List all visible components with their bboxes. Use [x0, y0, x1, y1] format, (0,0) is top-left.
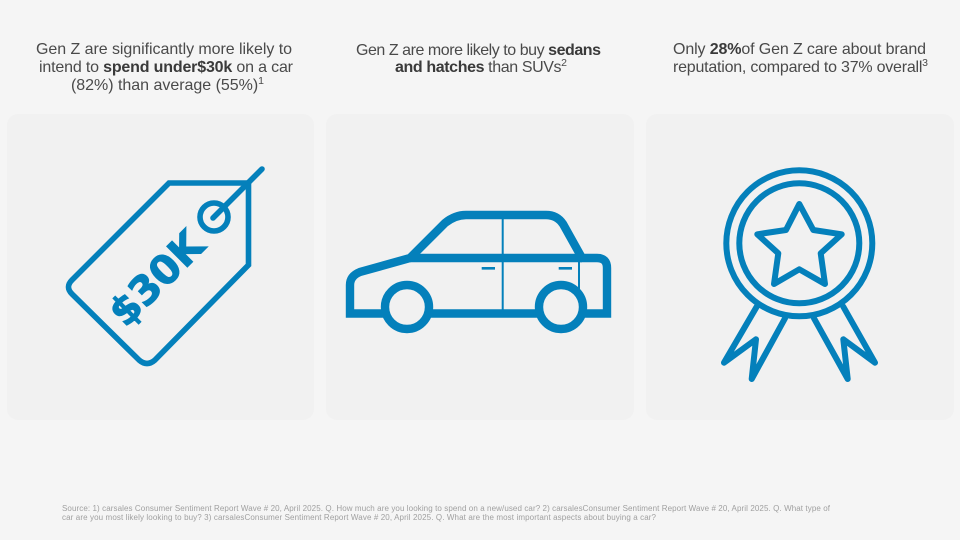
heading: brand reputation: reputation, compared to 37% overall — [673, 59, 922, 76]
heading: brand reputation: Only 28%of Gen Z care about brand — [673, 41, 926, 58]
heading: sedans and hatches: and hatches than SUVs — [395, 59, 562, 76]
heading: sedans and hatches: Gen Z are more likely to buy sedans — [356, 42, 601, 59]
panel: medal card — [646, 114, 954, 420]
heading: sedans and hatches — [356, 42, 601, 76]
source footnote: car are you most likely looking to buy? 3) carsalesConsumer Sentiment Report Wave # 20, April 2025. Q. What are the most important aspects about buying a car? — [62, 513, 657, 522]
panel: car card — [326, 114, 634, 420]
source footnote: Source: 1) carsales Consumer Sentiment Report Wave # 20, April 2025. Q. How much are you looking to spend on a new/used car? 2) carsalesConsumer Sentiment Report Wave # 20, April 2025. Q. What type of — [62, 504, 831, 513]
heading: spend under $30k: (82%) than average (55%) — [71, 77, 258, 94]
heading: spend under $30k: 1 — [258, 75, 264, 87]
icon: car — [350, 215, 607, 329]
heading: brand reputation: 3 — [922, 57, 928, 69]
icon: $30K price tag — [68, 169, 262, 364]
heading: brand reputation — [673, 41, 928, 76]
heading: sedans and hatches: 2 — [561, 57, 567, 69]
source footnote — [62, 504, 831, 522]
tag label: $30K — [100, 221, 215, 336]
heading: spend under $30k: intend to spend under$30k on a car — [39, 59, 294, 76]
icon: award medal — [724, 170, 875, 379]
heading: spend under $30k — [36, 41, 294, 94]
heading: spend under $30k: Gen Z are significantly more likely to — [36, 41, 292, 58]
panel: price tag card — [7, 114, 314, 420]
